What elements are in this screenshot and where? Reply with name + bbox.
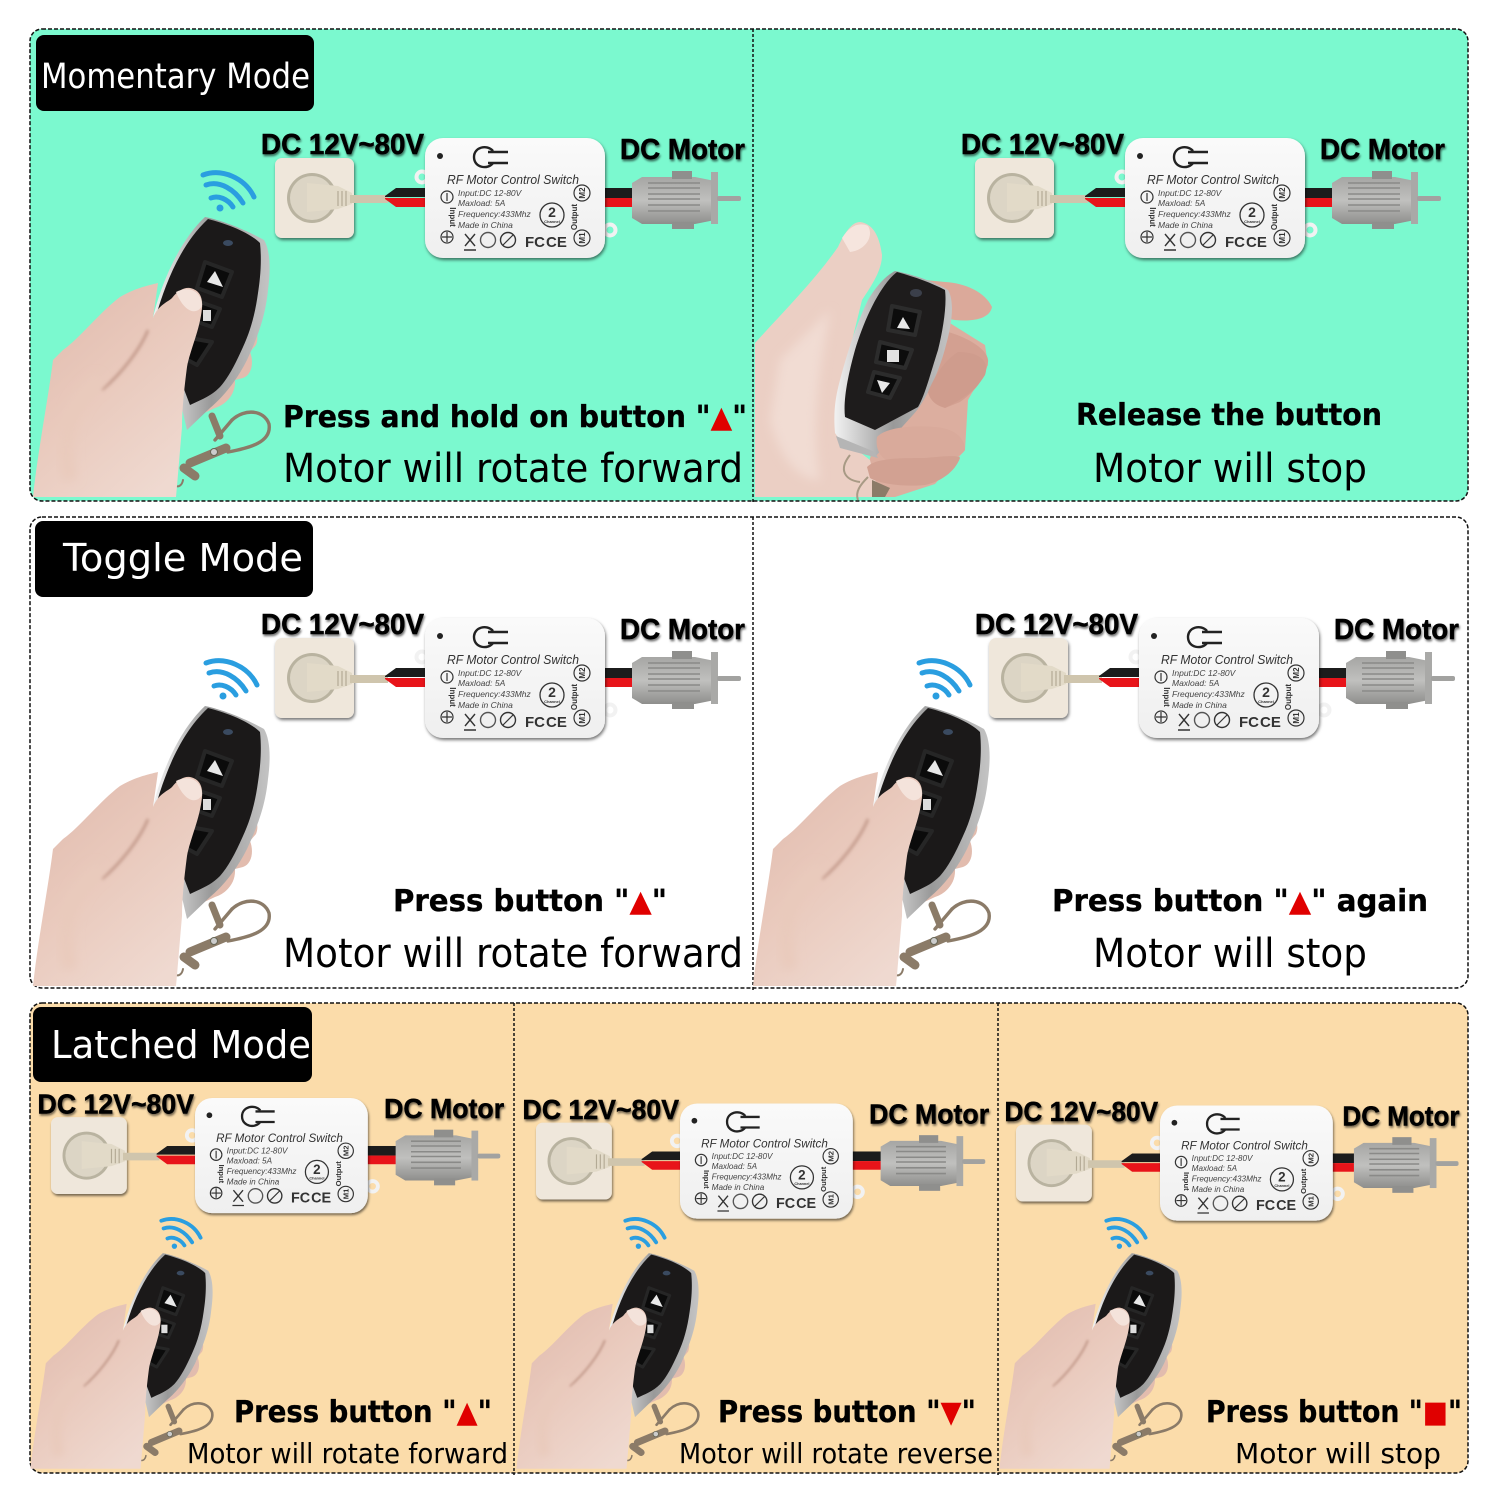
instruction: release: Release the button — [1076, 398, 1382, 433]
motor label: DC Motor — [1320, 134, 1445, 166]
switch labels: Made in China — [712, 1183, 765, 1192]
power label: DC 12V~80V — [261, 609, 425, 641]
switch labels: Maxload: 5A — [1172, 678, 1220, 688]
switch labels: Maxload: 5A — [1192, 1164, 1237, 1173]
motor drawing — [1346, 651, 1455, 709]
switch labels: CE — [546, 714, 567, 731]
switch labels: Input — [217, 1164, 226, 1184]
motor label: DC Motor — [869, 1099, 989, 1130]
power label: DC 12V~80V — [261, 129, 425, 161]
switch labels: CE — [546, 234, 567, 251]
switch labels: Input — [448, 207, 457, 227]
switch labels: Input:DC 12-80V — [1192, 1154, 1254, 1163]
switch labels: Maxload: 5A — [1158, 198, 1206, 208]
switch labels: RF Motor Control Switch — [1147, 173, 1279, 187]
motor label: DC Motor — [620, 134, 745, 166]
switch labels: Frequency:433Mhz — [458, 209, 532, 219]
switch labels: M2 — [578, 667, 587, 679]
motor label: DC Motor — [620, 614, 745, 646]
switch labels: CE — [1260, 714, 1281, 731]
switch labels: Input — [1148, 207, 1157, 227]
switch labels: RF Motor Control Switch — [701, 1137, 828, 1151]
motor label: DC Motor — [384, 1093, 504, 1124]
wiring diagram: momentary left — [261, 129, 745, 258]
switch labels: M1 — [1307, 1195, 1316, 1207]
switch labels: CE — [796, 1196, 817, 1212]
heading: toggle mode — [35, 521, 313, 597]
switch labels: FC — [525, 714, 545, 731]
switch labels: 2 — [798, 1167, 806, 1182]
instruction: press and hold: Press and hold on button "▲" — [283, 400, 747, 435]
switch labels: RF Motor Control Switch — [1181, 1139, 1308, 1153]
panel: momentary mode — [30, 29, 1468, 504]
hand pressing remote — [753, 706, 990, 986]
switch labels: 2 — [1278, 1169, 1286, 1184]
power label: DC 12V~80V — [961, 129, 1125, 161]
switch labels: M2 — [1278, 187, 1287, 199]
switch labels: RF Motor Control Switch — [447, 653, 579, 667]
switch labels: FC — [525, 234, 545, 251]
hand holding remote, released — [755, 222, 992, 500]
switch labels: Frequency:433Mhz — [712, 1172, 782, 1181]
motor drawing — [632, 171, 741, 229]
switch labels: M1 — [578, 232, 587, 244]
switch labels: M2 — [578, 187, 587, 199]
switch labels: Output — [570, 204, 579, 230]
switch labels: Output — [1270, 204, 1279, 230]
switch labels — [216, 1131, 351, 1207]
switch labels — [701, 1137, 836, 1212]
icon: wifi signal — [206, 661, 257, 698]
power label: DC 12V~80V — [975, 609, 1139, 641]
switch labels: M1 — [1292, 712, 1301, 724]
hand pressing remote — [33, 706, 270, 986]
switch labels: Maxload: 5A — [458, 198, 506, 208]
wiring diagram: momentary right — [961, 129, 1445, 258]
switch labels: Made in China — [458, 220, 513, 230]
hand pressing remote — [33, 217, 270, 497]
motor drawing — [881, 1135, 985, 1191]
switch labels: 2 — [548, 684, 556, 700]
power label: DC 12V~80V — [523, 1094, 679, 1125]
switch labels: M1 — [827, 1193, 836, 1205]
icon: wifi signal — [203, 173, 254, 210]
switch labels — [1181, 1139, 1316, 1214]
switch labels: RF Motor Control Switch — [447, 173, 579, 187]
power label: DC 12V~80V — [38, 1088, 194, 1119]
instruction: press button: Press button "▲" — [393, 884, 667, 919]
switch labels: Output — [819, 1166, 828, 1192]
switch labels: Maxload: 5A — [227, 1156, 272, 1165]
switch labels: FC — [1256, 1198, 1275, 1214]
wiring diagram: latched stop — [1004, 1096, 1460, 1221]
switch labels: Output — [1299, 1168, 1308, 1194]
switch labels: Channel — [1258, 699, 1274, 704]
switch labels: Channel — [544, 219, 560, 224]
switch labels: Output — [334, 1161, 343, 1186]
switch labels: Frequency:433Mhz — [1192, 1174, 1262, 1183]
panel: toggle mode — [30, 517, 1468, 990]
switch labels: Made in China — [1172, 700, 1227, 710]
switch labels: Frequency:433Mhz — [1158, 209, 1232, 219]
heading: momentary mode: Momentary Mode — [41, 57, 310, 97]
instruction: press again: Press button "▲" again — [1052, 884, 1428, 919]
switch labels — [447, 173, 587, 251]
panel: latched mode — [30, 1003, 1468, 1475]
instruction: press up: Press button "▲" — [234, 1395, 492, 1430]
switch labels: Maxload: 5A — [458, 678, 506, 688]
result: stop: Motor will stop — [1093, 931, 1367, 977]
switch labels: Made in China — [227, 1177, 280, 1186]
switch labels: M1 — [1278, 232, 1287, 244]
switch labels: CE — [311, 1191, 332, 1207]
switch labels: Frequency:433Mhz — [227, 1167, 297, 1176]
result: rotate reverse: Motor will rotate reverse — [679, 1437, 993, 1470]
icon: wifi signal — [625, 1219, 665, 1248]
switch labels: RF Motor Control Switch — [1161, 653, 1293, 667]
switch labels: CE — [1246, 234, 1267, 251]
switch labels: Made in China — [458, 700, 513, 710]
switch labels: Made in China — [1158, 220, 1213, 230]
switch labels: M1 — [578, 712, 587, 724]
motor drawing — [632, 651, 741, 709]
result: stop: Motor will stop — [1235, 1437, 1441, 1470]
switch labels: Channel — [794, 1182, 809, 1186]
switch labels — [1161, 653, 1301, 731]
switch labels: M2 — [827, 1151, 836, 1162]
switch labels: Frequency:433Mhz — [1172, 689, 1246, 699]
switch labels: FC — [776, 1196, 795, 1212]
switch labels: 2 — [313, 1162, 321, 1177]
wiring diagram: toggle right — [975, 609, 1459, 738]
motor drawing — [396, 1130, 500, 1185]
motor label: DC Motor — [1334, 614, 1459, 646]
hand pressing remote — [999, 1253, 1182, 1469]
switch labels: M1 — [342, 1188, 351, 1199]
switch labels: Input — [448, 687, 457, 707]
result: stop: Motor will stop — [1093, 446, 1367, 492]
switch labels: FC — [1239, 714, 1259, 731]
hand pressing remote — [30, 1253, 213, 1469]
switch labels: Input:DC 12-80V — [1172, 668, 1237, 678]
motor label: DC Motor — [1342, 1101, 1460, 1132]
switch labels — [1147, 173, 1287, 251]
wiring diagram: latched up — [38, 1088, 504, 1213]
heading: momentary mode — [36, 35, 314, 111]
icon: wifi signal — [161, 1219, 201, 1248]
switch labels — [447, 653, 587, 731]
result: rotate forward: Motor will rotate forward — [283, 446, 743, 492]
motor drawing — [1354, 1137, 1459, 1193]
heading: toggle mode: Toggle Mode — [62, 536, 303, 580]
switch labels: Output — [570, 684, 579, 710]
switch labels: M2 — [1307, 1153, 1316, 1164]
switch labels: Frequency:433Mhz — [458, 689, 532, 699]
switch labels: Input — [1182, 1172, 1191, 1191]
switch labels: Output — [1284, 684, 1293, 710]
switch labels: CE — [1276, 1198, 1297, 1214]
switch labels: FC — [291, 1191, 310, 1207]
power label: DC 12V~80V — [1004, 1096, 1158, 1127]
switch labels: 2 — [1262, 684, 1270, 700]
switch labels: FC — [1225, 234, 1245, 251]
switch labels: Input:DC 12-80V — [458, 188, 523, 198]
switch labels: Input — [1162, 687, 1171, 707]
instruction: press stop: Press button "■" — [1206, 1395, 1462, 1430]
switch labels: Input — [702, 1170, 711, 1189]
heading: latched mode — [33, 1007, 312, 1082]
switch labels: Made in China — [1192, 1185, 1245, 1194]
switch labels: Channel — [544, 699, 560, 704]
hand pressing remote — [516, 1253, 699, 1469]
switch labels: RF Motor Control Switch — [216, 1131, 343, 1145]
switch labels: 2 — [1248, 204, 1256, 220]
wiring diagram: latched down — [523, 1094, 989, 1219]
switch labels: Channel — [309, 1177, 324, 1181]
instruction: press down: Press button "▼" — [718, 1395, 976, 1430]
switch labels: 2 — [548, 204, 556, 220]
switch labels: M2 — [342, 1145, 351, 1156]
switch labels: Maxload: 5A — [712, 1162, 757, 1171]
switch labels: Input:DC 12-80V — [458, 668, 523, 678]
motor drawing — [1332, 171, 1441, 229]
result: rotate forward: Motor will rotate forward — [283, 931, 743, 977]
heading: latched mode: Latched Mode — [51, 1023, 311, 1067]
switch labels: Channel — [1244, 219, 1260, 224]
switch labels: Input:DC 12-80V — [712, 1152, 774, 1161]
switch labels: Input:DC 12-80V — [1158, 188, 1223, 198]
result: rotate forward: Motor will rotate forward — [187, 1437, 508, 1470]
wiring diagram: toggle left — [261, 609, 745, 738]
icon: wifi signal — [919, 661, 970, 698]
icon: wifi signal — [1106, 1219, 1146, 1248]
switch labels: Input:DC 12-80V — [227, 1147, 289, 1156]
switch labels: Channel — [1274, 1184, 1289, 1188]
switch labels: M2 — [1292, 667, 1301, 679]
